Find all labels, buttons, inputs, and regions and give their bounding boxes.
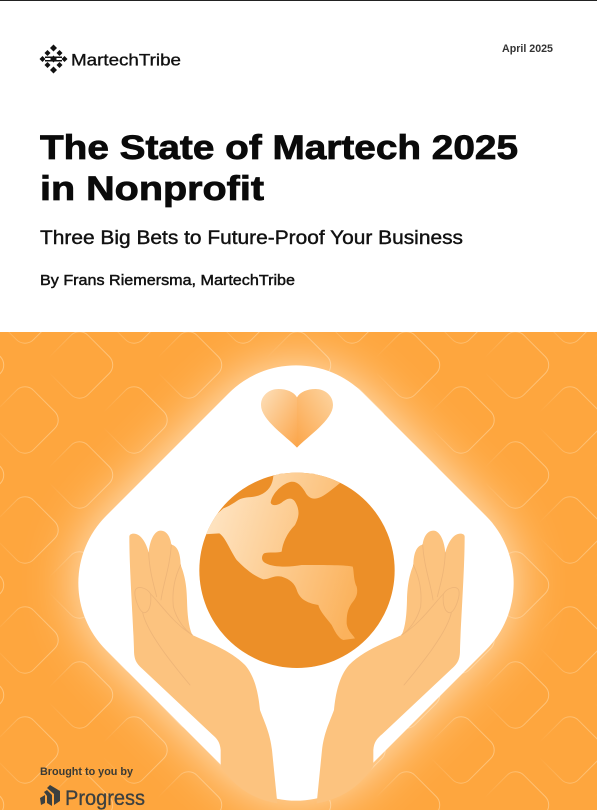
icon: Progress mark <box>40 785 60 806</box>
title: The State of Martech 2025 <box>40 129 518 167</box>
logo wordmark: MartechTribe <box>71 50 181 70</box>
panel: orange hero <box>0 332 597 810</box>
subtitle: Three Big Bets to Future-Proof Your Business <box>40 228 463 249</box>
title: in Nonprofit <box>40 170 265 208</box>
sponsor logo: Progress <box>40 785 145 810</box>
Progress wordmark: Progress <box>65 787 145 810</box>
logo: MartechTribe <box>40 44 181 74</box>
sponsor: brought to you by: Brought to you by <box>40 766 134 778</box>
date: April 2025 <box>502 43 553 55</box>
globe <box>193 463 395 668</box>
hand: left <box>129 531 277 803</box>
icon: heart <box>261 389 333 448</box>
hand: right <box>317 531 465 803</box>
byline: By Frans Riemersma, MartechTribe <box>40 272 295 289</box>
white rounded diamond <box>78 365 514 801</box>
title <box>40 129 518 208</box>
glow behind diamond <box>78 365 514 801</box>
illustration <box>129 389 465 803</box>
icon: logo mark <box>40 44 68 74</box>
top rule <box>0 0 597 1</box>
